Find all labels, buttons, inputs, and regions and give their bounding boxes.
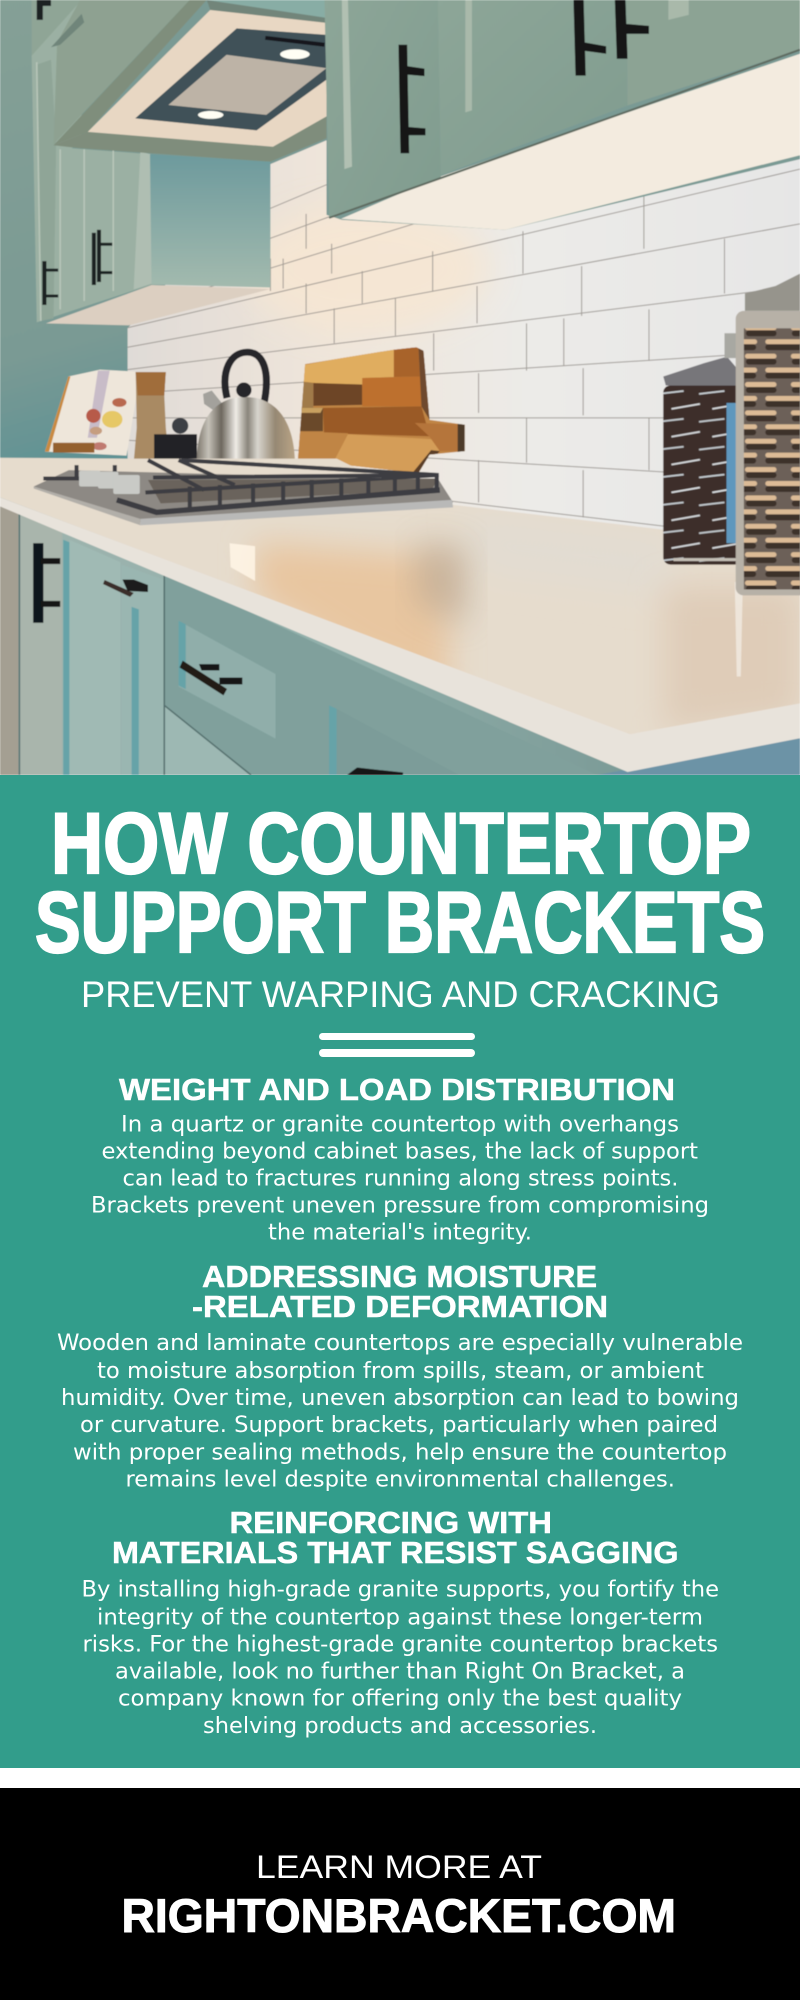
body text: integrity of the countertop against these longer-term xyxy=(97,1606,703,1630)
black canister xyxy=(154,418,197,461)
body text xyxy=(91,1112,709,1246)
subtitle: PREVENT WARPING AND CRACKING xyxy=(81,974,720,1015)
section: moisture-related deformation xyxy=(57,1259,743,1492)
panel: teal content background xyxy=(0,775,800,1768)
left upper cabinet faces xyxy=(32,0,152,322)
left upper cabinet underside xyxy=(46,285,270,325)
heading xyxy=(112,1505,678,1570)
call to action: learn more at: LEARN MORE AT xyxy=(256,1849,542,1885)
website url: RIGHTONBRACKET.COM xyxy=(122,1889,676,1942)
body text: In a quartz or granite countertop with overhangs xyxy=(121,1112,679,1138)
cook book xyxy=(45,370,137,456)
heading: MATERIALS THAT RESIST SAGGING xyxy=(112,1535,678,1570)
body text: shelving products and accessories. xyxy=(203,1714,597,1739)
countertop front edge xyxy=(0,497,800,772)
countertop surface xyxy=(0,448,800,746)
body text: humidity. Over time, uneven absorption can lead to bowing xyxy=(61,1386,739,1411)
heading xyxy=(192,1259,608,1324)
title xyxy=(35,796,765,971)
body text: or curvature. Support brackets, particularly when paired xyxy=(80,1413,718,1438)
body text: to moisture absorption from spills, steam, or ambient xyxy=(97,1359,704,1384)
body text: company known for offering only the best quality xyxy=(118,1686,682,1712)
under-cabinet light strip xyxy=(341,54,800,230)
body text: extending beyond cabinet bases, the lack of support xyxy=(102,1140,698,1164)
body text: the material's integrity. xyxy=(268,1220,532,1246)
white gap strip xyxy=(0,1768,800,1788)
cabinet bar handles xyxy=(398,0,649,153)
photo: kitchen countertop xyxy=(0,0,800,775)
body text: with proper sealing methods, help ensure the countertop xyxy=(73,1440,727,1466)
body text: Brackets prevent uneven pressure from compromising xyxy=(91,1194,709,1218)
section: reinforcing materials xyxy=(82,1505,719,1739)
heading: ADDRESSING MOISTURE xyxy=(202,1259,597,1294)
left upper cabinet end panel xyxy=(150,154,270,288)
base cabinets xyxy=(0,497,800,775)
heading: REINFORCING WITH xyxy=(230,1505,552,1540)
jar of dark cookies xyxy=(663,333,742,565)
range hood xyxy=(51,0,327,162)
section: weight and load distribution xyxy=(91,1072,709,1246)
left wall xyxy=(0,0,128,460)
body text: remains level despite environmental challenges. xyxy=(126,1468,675,1492)
gas cooktop xyxy=(34,460,453,525)
body text: Wooden and laminate countertops are especially vulnerable xyxy=(57,1331,743,1356)
body text xyxy=(82,1578,719,1739)
panel: black footer xyxy=(0,1788,800,2000)
body text: risks. For the highest-grade granite countertop brackets xyxy=(82,1632,718,1658)
heading: WEIGHT AND LOAD DISTRIBUTION xyxy=(119,1072,675,1107)
body text: By installing high-grade granite supports, you fortify the xyxy=(82,1578,719,1602)
body text: available, look no further than Right On Bracket, a xyxy=(115,1660,685,1684)
white subway tile backsplash xyxy=(126,140,800,530)
base cabinet handles xyxy=(33,543,403,775)
cutting board xyxy=(298,346,466,473)
upper cabinet doors xyxy=(324,0,800,218)
jar of sandwich cookies xyxy=(736,274,800,595)
tea kettle xyxy=(197,352,295,472)
body text: can lead to fractures running along stress points. xyxy=(122,1166,678,1192)
heading: -RELATED DEFORMATION xyxy=(192,1289,608,1324)
body text xyxy=(57,1331,743,1492)
pepper mill xyxy=(134,372,169,463)
double-line divider xyxy=(319,1033,475,1057)
